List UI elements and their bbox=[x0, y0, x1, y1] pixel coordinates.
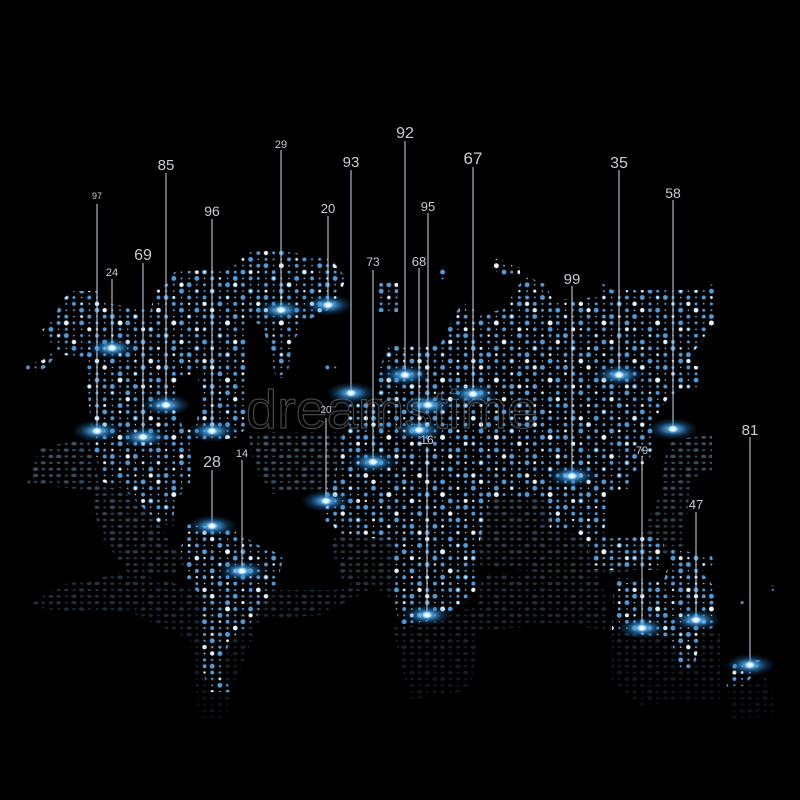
pin 47: 47 bbox=[689, 497, 703, 512]
watermark: dreamstime bbox=[246, 380, 538, 440]
pin 20 atlantic bbox=[301, 405, 351, 512]
pin 93: 93 bbox=[343, 154, 359, 171]
pin 79: 79 bbox=[636, 445, 648, 457]
pin 29 bbox=[256, 139, 306, 321]
pin 99 bbox=[547, 271, 597, 487]
pin 24: 24 bbox=[106, 267, 118, 279]
pin 96 bbox=[187, 203, 237, 442]
pin 20 atlantic: 20 bbox=[320, 405, 332, 416]
pin 68 bbox=[394, 254, 444, 441]
pin 93 bbox=[326, 154, 376, 404]
pin 24 bbox=[87, 267, 137, 359]
pin 29: 29 bbox=[275, 139, 287, 151]
pin 95: 95 bbox=[421, 199, 435, 214]
pin 81 bbox=[725, 422, 775, 676]
pin 20 north bbox=[303, 201, 353, 316]
pin 95 bbox=[403, 199, 453, 416]
pin 16: 16 bbox=[420, 433, 434, 447]
pin 58 bbox=[648, 185, 698, 440]
pin 73 bbox=[348, 255, 398, 473]
reflection of map bbox=[27, 432, 774, 718]
pin 68: 68 bbox=[412, 254, 426, 269]
pin 58: 58 bbox=[665, 185, 681, 201]
pin 35 bbox=[594, 155, 644, 386]
pin 96: 96 bbox=[204, 203, 220, 219]
dotted world map bbox=[26, 250, 774, 692]
pin 79 bbox=[617, 445, 667, 639]
pin 97 bbox=[72, 191, 122, 442]
pin 16 bbox=[402, 433, 452, 626]
pin 20 north: 20 bbox=[321, 201, 335, 216]
pin 73: 73 bbox=[366, 255, 380, 269]
pin 35: 35 bbox=[610, 155, 628, 172]
pin 69: 69 bbox=[134, 247, 152, 264]
pin 67: 67 bbox=[464, 149, 482, 168]
data pins bbox=[72, 125, 775, 676]
pin 69 bbox=[118, 247, 168, 448]
pin 14 bbox=[217, 448, 267, 582]
pin 92: 92 bbox=[396, 125, 414, 142]
pin 14: 14 bbox=[236, 448, 248, 460]
pin 28: 28 bbox=[203, 454, 221, 471]
pin 85: 85 bbox=[158, 157, 174, 174]
pin 85 bbox=[141, 157, 191, 416]
pin 92 bbox=[380, 125, 430, 386]
pin 81: 81 bbox=[742, 422, 758, 439]
pin 67 bbox=[448, 149, 498, 405]
pin 97: 97 bbox=[92, 191, 102, 201]
pin 28 bbox=[187, 454, 237, 537]
pin 99: 99 bbox=[564, 271, 580, 288]
pin 47 bbox=[671, 497, 721, 631]
